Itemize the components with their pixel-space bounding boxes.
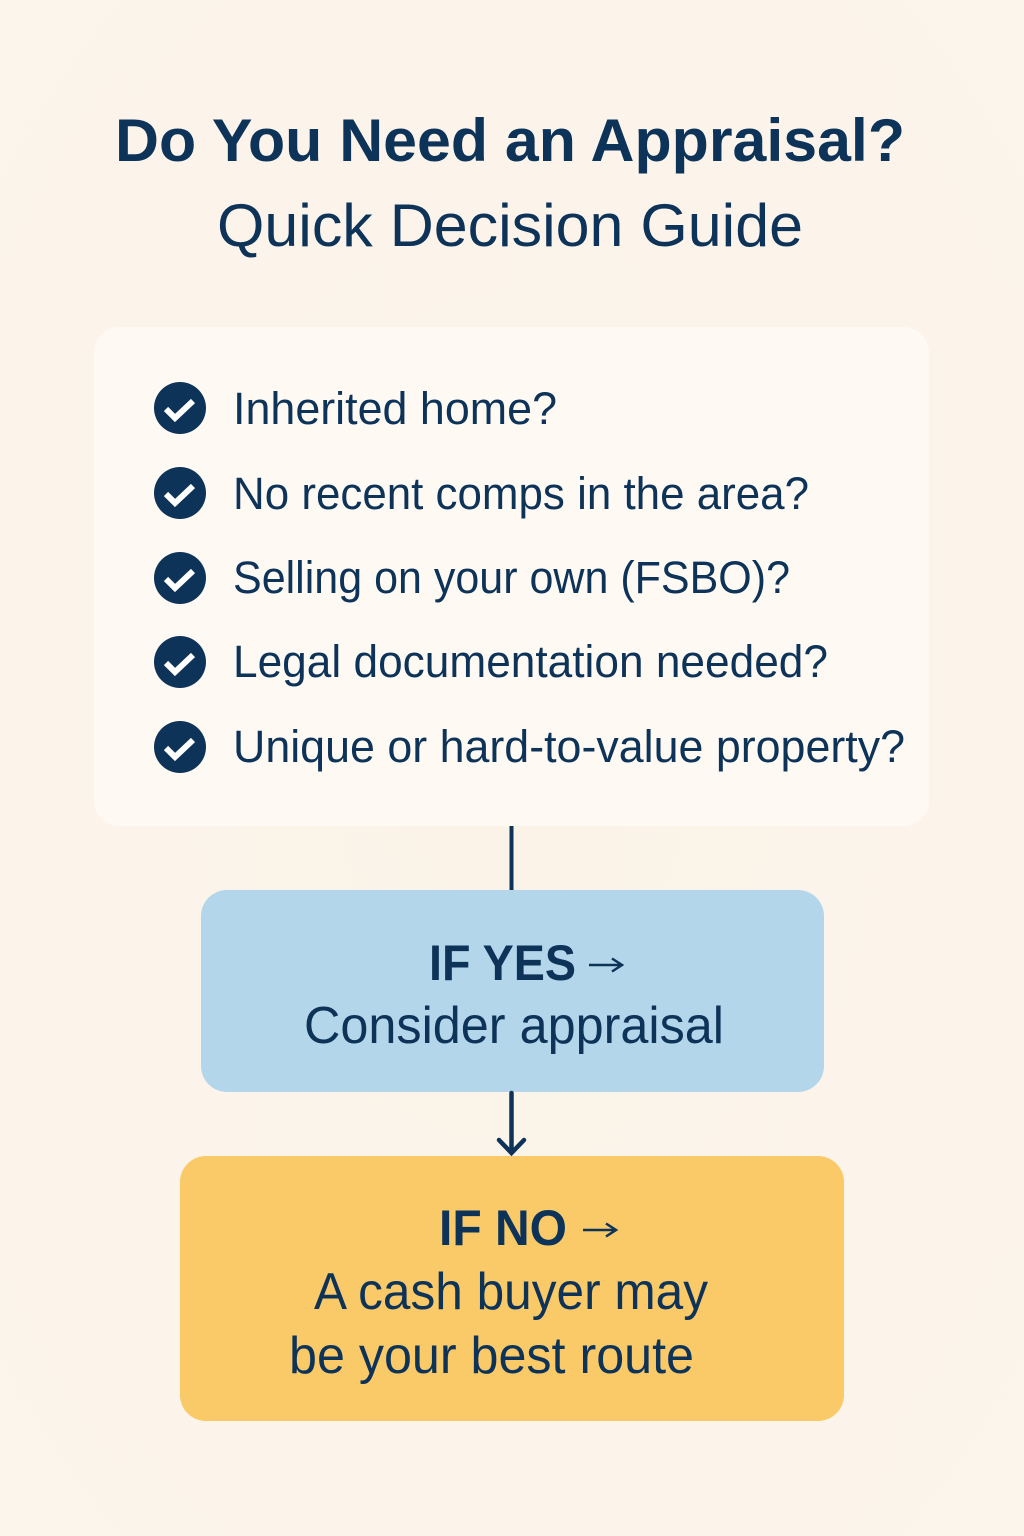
title (115, 107, 905, 259)
arrow: down to if no (499, 1093, 524, 1153)
checklist item: inherited home: Inherited home? (233, 383, 557, 434)
text: consider appraisal: Consider appraisal (304, 997, 724, 1055)
checklist item: unique property: Unique or hard-to-value property? (233, 721, 905, 772)
text: cash buyer line 2: be your best route (289, 1327, 694, 1385)
checklist item: no recent comps: No recent comps in the area? (233, 468, 809, 519)
heading: main title: Do You Need an Appraisal? (115, 107, 905, 174)
label: if no: IF NO (439, 1200, 567, 1256)
arrow: if no (583, 1224, 616, 1236)
checklist item: legal documentation: Legal documentation needed? (233, 636, 828, 687)
heading: subtitle: Quick Decision Guide (217, 192, 803, 259)
checklist item: selling on your own: Selling on your own (FSBO)? (233, 552, 790, 603)
panel: if no (180, 1156, 844, 1421)
panel: checklist (94, 327, 929, 826)
panel: if yes (201, 890, 824, 1092)
connector line (510, 826, 514, 890)
label: if yes: IF YES (429, 935, 576, 991)
text: cash buyer line 1: A cash buyer may (314, 1263, 708, 1321)
arrow: if yes (589, 958, 622, 972)
